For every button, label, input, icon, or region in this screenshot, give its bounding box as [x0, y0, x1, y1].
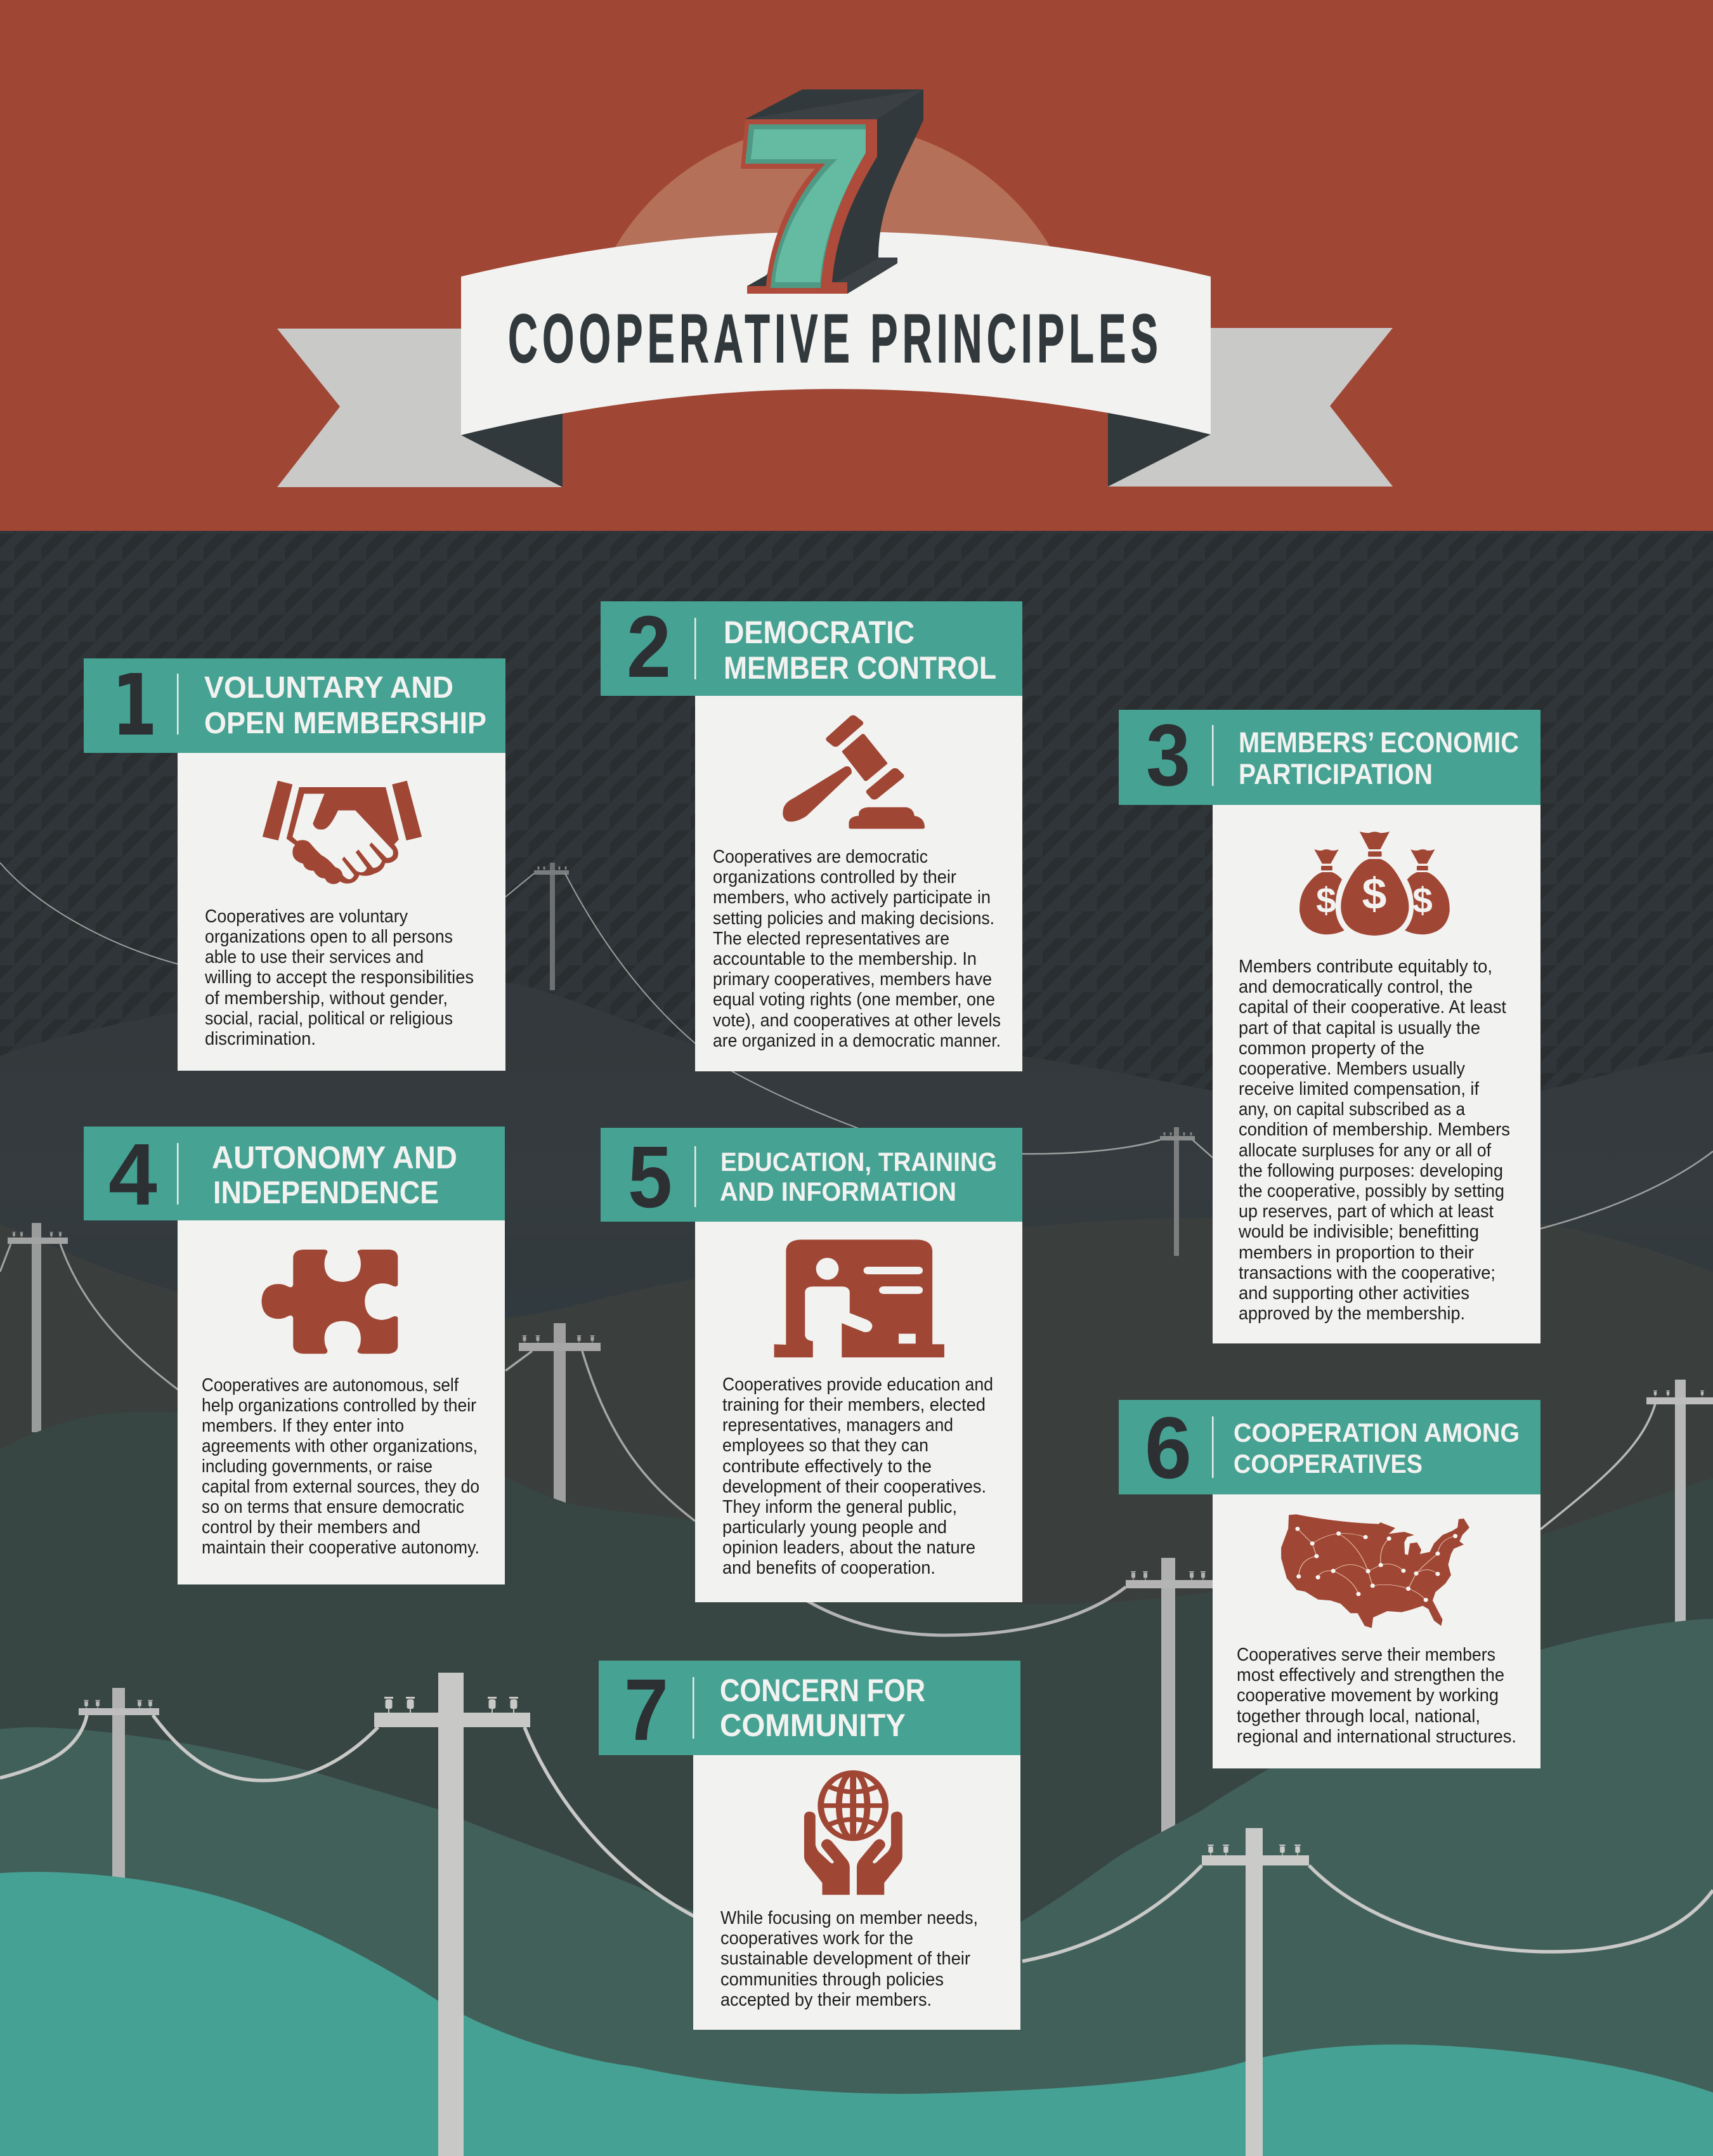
icon: US network map — [1281, 1514, 1469, 1628]
panel: principle 7 — [599, 1661, 1020, 2030]
heading: CONCERN FOR — [720, 1673, 925, 1708]
card body — [178, 1220, 505, 1584]
body text: opinion leaders, about the nature — [722, 1538, 975, 1558]
heading: MEMBER CONTROL — [724, 650, 996, 686]
body text: condition of membership. Members — [1239, 1120, 1510, 1140]
body text — [1237, 1645, 1516, 1747]
front poles — [374, 1673, 1309, 2156]
far pole 2 and wires — [1022, 1127, 1713, 1256]
icon: money bags — [1299, 832, 1450, 936]
card header — [601, 1128, 1022, 1222]
number: 5 — [628, 1128, 672, 1226]
hill layer 2 — [0, 1216, 1713, 2156]
big numeral 7 — [741, 89, 923, 294]
body text: They inform the general public, — [722, 1497, 957, 1517]
number: 1 — [112, 657, 157, 755]
title text: COOPERATIVE PRINCIPLES — [508, 300, 1163, 377]
card header — [84, 658, 505, 753]
body text: particularly young people and — [722, 1517, 947, 1538]
heading: AND INFORMATION — [720, 1177, 956, 1206]
icon: teacher at board — [774, 1239, 944, 1357]
ribbon main — [461, 232, 1211, 435]
body text: sustainable development of their — [720, 1949, 970, 1969]
heading: COOPERATIVES — [1234, 1449, 1423, 1479]
heading: AUTONOMY AND — [212, 1140, 457, 1175]
body text: help organizations controlled by their — [202, 1395, 476, 1416]
far pole 1 — [534, 863, 569, 990]
body text: members. If they enter into — [202, 1416, 404, 1436]
body text: representatives, managers and — [722, 1415, 953, 1435]
body text: the cooperative, possibly by setting — [1239, 1181, 1504, 1201]
pole behind front hill — [79, 1688, 159, 1878]
body text: together through local, national, — [1237, 1706, 1480, 1727]
hill layer 4 — [0, 1619, 1713, 2156]
sun — [615, 138, 1050, 247]
body text: maintain their cooperative autonomy. — [202, 1538, 479, 1558]
body text: contribute effectively to the — [722, 1456, 932, 1477]
body text: vote), and cooperatives at other levels — [713, 1010, 1001, 1031]
front wires — [0, 1715, 1713, 1961]
panel: principle 4 — [84, 1126, 505, 1584]
body text: would be indivisible; benefitting — [1238, 1222, 1479, 1242]
body text: allocate surpluses for any or all of — [1239, 1140, 1492, 1161]
body text: employees so that they can — [722, 1435, 928, 1456]
panel: principle 6 — [1119, 1399, 1540, 1768]
number: 3 — [1146, 707, 1190, 804]
icon: money bags: $ — [1412, 880, 1433, 921]
heading: MEMBERS’ ECONOMIC — [1239, 726, 1519, 759]
body text: common property of the — [1239, 1038, 1424, 1059]
title graphic — [277, 89, 1393, 487]
body text: and supporting other activities — [1239, 1283, 1469, 1303]
mid wires — [0, 1244, 1655, 1635]
body text: training for their members, elected — [722, 1395, 986, 1415]
body text: accepted by their members. — [720, 1990, 932, 2010]
poles behind hill 4 — [1126, 1380, 1713, 1843]
heading: DEMOCRATIC — [724, 615, 915, 650]
body text: approved by the membership. — [1239, 1303, 1465, 1324]
body text: Cooperatives are democratic — [713, 847, 928, 867]
icon: gavel — [785, 718, 923, 827]
body text — [204, 906, 474, 1049]
body text: any, on capital subscribed as a — [1239, 1099, 1466, 1120]
heading — [1234, 1418, 1520, 1479]
card body — [1213, 805, 1540, 1343]
body text: organizations controlled by their — [713, 867, 956, 887]
card header — [601, 601, 1022, 696]
card body — [695, 696, 1022, 1071]
heading: EDUCATION, TRAINING — [720, 1147, 997, 1177]
body text: communities through policies — [720, 1970, 944, 1990]
body text: regional and international structures. — [1237, 1727, 1516, 1747]
body text: and democratically control, the — [1239, 977, 1473, 997]
body text: agreements with other organizations, — [202, 1436, 478, 1456]
body text: most effectively and strengthen the — [1237, 1665, 1504, 1685]
heading: COMMUNITY — [720, 1708, 906, 1743]
ribbon right tail — [1108, 328, 1393, 487]
card header — [84, 1127, 505, 1220]
body text: Cooperatives provide education and — [722, 1375, 993, 1395]
body text — [1238, 957, 1510, 1324]
body text: While focusing on member needs, — [720, 1908, 978, 1928]
body text: members in proportion to their — [1239, 1243, 1474, 1263]
body text: cooperative. Members usually — [1239, 1059, 1465, 1079]
body text: equal voting rights (one member, one — [713, 990, 995, 1010]
panel: principle 1 — [84, 657, 505, 1071]
number: 7 — [624, 1661, 668, 1759]
body text: of membership, without gender, — [205, 988, 448, 1009]
body text: are organized in a democratic manner. — [713, 1031, 1001, 1051]
body text — [720, 1908, 978, 2010]
body text: accountable to the membership. In — [713, 949, 977, 969]
body text: members, who actively participate in — [713, 887, 991, 908]
number: 6 — [1145, 1399, 1192, 1497]
body text: receive limited compensation, if — [1239, 1079, 1480, 1099]
body text: able to use their services and — [205, 947, 424, 967]
card body — [178, 753, 505, 1071]
hill layer 1 — [0, 981, 1713, 2156]
body text — [722, 1375, 993, 1578]
number: 2 — [627, 598, 671, 696]
body text: part of that capital is usually the — [1239, 1018, 1480, 1038]
card header — [1119, 710, 1540, 805]
mid poles behind hill 3 — [8, 1223, 601, 1503]
heading — [204, 671, 486, 740]
body text: The elected representatives are — [713, 929, 949, 949]
body text: capital from external sources, they do — [202, 1477, 479, 1497]
card body — [1213, 1494, 1540, 1768]
body text: discrimination. — [205, 1029, 316, 1049]
body text: social, racial, political or religious — [205, 1009, 453, 1029]
body text: transactions with the cooperative; — [1239, 1263, 1495, 1283]
number: 4 — [108, 1126, 157, 1224]
body text: willing to accept the responsibilities — [204, 967, 474, 988]
body text: setting policies and making decisions. — [713, 908, 994, 929]
body text: cooperatives work for the — [720, 1928, 913, 1949]
heading: INDEPENDENCE — [213, 1175, 439, 1210]
far wires from pole 1 — [0, 863, 859, 1128]
body text: capital of their cooperative. At least — [1239, 997, 1506, 1017]
body text — [202, 1375, 479, 1558]
ribbon left fold — [461, 406, 563, 487]
card header — [599, 1661, 1020, 1755]
header background — [0, 0, 1713, 531]
card body — [693, 1755, 1020, 2030]
body text: Cooperatives are voluntary — [205, 906, 408, 927]
ribbon right fold — [1108, 406, 1211, 487]
body text: Members contribute equitably to, — [1239, 957, 1492, 977]
dark patterned background — [0, 531, 1713, 2156]
body text — [713, 847, 1001, 1051]
heading: COOPERATION AMONG — [1234, 1418, 1520, 1447]
heading — [212, 1140, 457, 1210]
body text: cooperative movement by working — [1237, 1685, 1499, 1706]
body text: organizations open to all persons — [205, 927, 453, 947]
heading — [720, 1673, 925, 1743]
heading — [1239, 726, 1519, 790]
heading — [724, 615, 996, 686]
body text: development of their cooperatives. — [722, 1477, 986, 1497]
heading: PARTICIPATION — [1239, 758, 1433, 790]
icon: money bags: $ — [1316, 880, 1336, 921]
body text: control by their members and — [202, 1517, 420, 1538]
body text: up reserves, part of which at least — [1239, 1201, 1494, 1222]
panel: principle 5 — [601, 1128, 1022, 1602]
heading — [720, 1147, 997, 1206]
panel: principle 2 — [601, 598, 1022, 1071]
card header — [1119, 1400, 1540, 1494]
heading: VOLUNTARY AND — [204, 671, 453, 705]
hill layer 3 — [0, 1412, 1713, 2156]
icon: handshake — [263, 781, 422, 884]
icon: hands holding globe — [804, 1773, 902, 1895]
front hill — [0, 1872, 1713, 2156]
ribbon left tail — [277, 329, 563, 487]
card body — [695, 1222, 1022, 1602]
icon: puzzle piece — [261, 1250, 398, 1354]
body text: Cooperatives serve their members — [1237, 1645, 1495, 1665]
body text: including governments, or raise — [202, 1456, 433, 1477]
body text: primary cooperatives, members have — [713, 969, 992, 990]
body text: Cooperatives are autonomous, self — [202, 1375, 459, 1395]
body text: so on terms that ensure democratic — [202, 1497, 464, 1517]
body text: the following purposes: developing — [1239, 1161, 1503, 1181]
heading: OPEN MEMBERSHIP — [204, 707, 486, 740]
body text: and benefits of cooperation. — [722, 1558, 935, 1578]
panel: principle 3 — [1119, 707, 1540, 1343]
icon: money bags: $ — [1362, 869, 1386, 918]
